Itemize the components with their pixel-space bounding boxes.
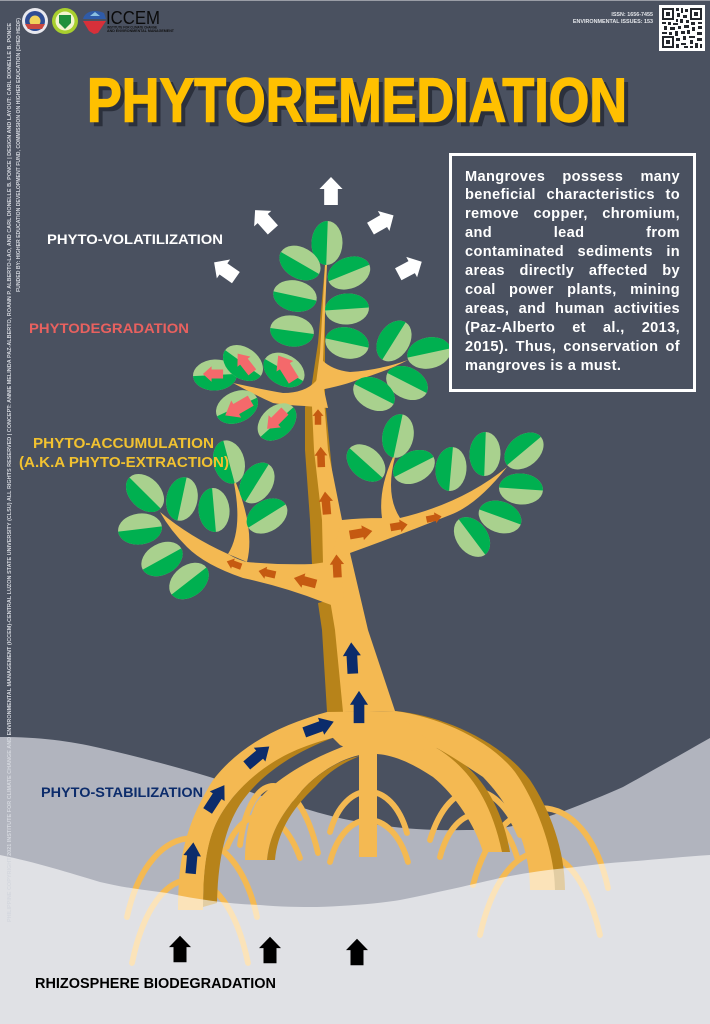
root junction <box>327 711 437 755</box>
upper right branch <box>320 360 408 390</box>
white volatilization arrows <box>207 177 427 287</box>
issn details <box>573 12 653 25</box>
label: phyto-accumulation <box>19 436 229 471</box>
callout: mangrove conservation text: beneficial characteristics to <box>465 187 680 203</box>
leaves: crown <box>268 220 454 418</box>
soil layer: pale top sediment <box>0 855 710 1024</box>
right prop root shadow <box>395 711 565 890</box>
callout: mangrove conservation text: remove copper, chromium, <box>465 206 680 222</box>
trunk <box>312 265 395 712</box>
lower left branch <box>160 512 345 610</box>
vertical credits: FUNDED BY: HIGHER EDUCATION DEVELOPMENT FUND, COMMISSION ON HIGHER EDUCATION (CHED HEDF) <box>16 18 22 292</box>
label: phyto-volatilization: PHYTO-VOLATILIZATION <box>47 231 223 247</box>
thin aerial roots <box>127 786 608 963</box>
label: phyto-accumulation: (A.K.A PHYTO-EXTRACTION) <box>19 455 229 471</box>
logo: iccem: ICCEM <box>106 8 160 28</box>
callout: mangrove conservation text: areas, and human activities <box>465 301 680 317</box>
logo: seal two <box>52 8 78 34</box>
lower left sub-branch <box>228 483 249 562</box>
trunk shadow side <box>305 265 345 712</box>
vertical credits <box>7 18 22 922</box>
leaves: right branch <box>339 411 551 564</box>
logo: seal one <box>22 8 48 34</box>
leaves: phytodegradation cluster <box>192 338 311 448</box>
pink degradation arrows <box>203 349 302 435</box>
label: phyto-accumulation: PHYTO-ACCUMULATION <box>33 436 214 452</box>
qr code <box>659 5 705 51</box>
issn details: ENVIRONMENTAL ISSUES: 153 <box>573 19 653 25</box>
right prop root <box>395 711 555 890</box>
vertical credits: PHILIPPINE COPYRIGHT 2021 INSTITUTE FOR CLIMATE CHANGE AND ENVIRONMENTAL MANAGEMENT (ICCEM)-CENTRAL LUZON STATE UNIVERSITY (CLSU) ALL RIGHTS RESERVED | CONCEPT: ANNIE MELINDA PAZ-ALBERTO, ROANN P. ALBERTO-LAO, AND CARL DIONELLE B. PONCE | DESIGN AND LAYOUT: CARL DIONELLE B. PONCE <box>7 23 13 922</box>
label: phytodegradation: PHYTODEGRADATION <box>29 320 189 336</box>
callout: mangrove conservation text: (Paz-Alberto et al., 2013, <box>465 320 680 336</box>
issn details: ISSN: 1656-7455 <box>611 12 653 18</box>
soil layer: middle gray sediment <box>0 737 710 1024</box>
callout: mangrove conservation text: 2015). Thus, conservation of <box>465 339 680 355</box>
label: rhizosphere biodegradation: RHIZOSPHERE BIODEGRADATION <box>35 976 276 992</box>
logo: iccem: INSTITUTE FOR CLIMATE CHANGE <box>107 26 157 30</box>
callout: mangrove conservation text: coal power plants, mining <box>465 282 680 298</box>
inner arch right shadow <box>435 747 510 852</box>
lower right sub-branch <box>381 457 400 518</box>
callout: mangrove conservation text: areas directly affected by <box>465 263 680 279</box>
lower right branch <box>330 467 507 560</box>
logo: iccem: AND ENVIRONMENTAL MANAGEMENT <box>107 29 174 33</box>
callout: mangrove conservation text: contaminated sediments in <box>465 244 680 260</box>
mangrove tree <box>127 265 608 963</box>
callout: mangrove conservation text <box>449 153 696 392</box>
inner arch left shadow <box>267 756 360 860</box>
leaves: left branch <box>116 437 294 607</box>
logo: iccem <box>83 8 174 34</box>
callout: mangrove conservation text: and lead from <box>465 225 680 241</box>
upper left branch <box>233 372 328 408</box>
black rhizosphere arrows <box>169 936 368 965</box>
left prop root <box>178 712 345 910</box>
callout: mangrove conservation text: mangroves is a must. <box>465 358 621 374</box>
label: phyto-stabilization: PHYTO-STABILIZATION <box>41 784 203 800</box>
inner arch <box>245 738 502 860</box>
callout: mangrove conservation text: Mangroves possess many <box>465 168 680 184</box>
orange transport arrows <box>225 409 443 591</box>
left prop root shadow <box>203 737 335 907</box>
navy root uptake arrows <box>182 642 368 874</box>
centre prop root <box>359 752 377 857</box>
